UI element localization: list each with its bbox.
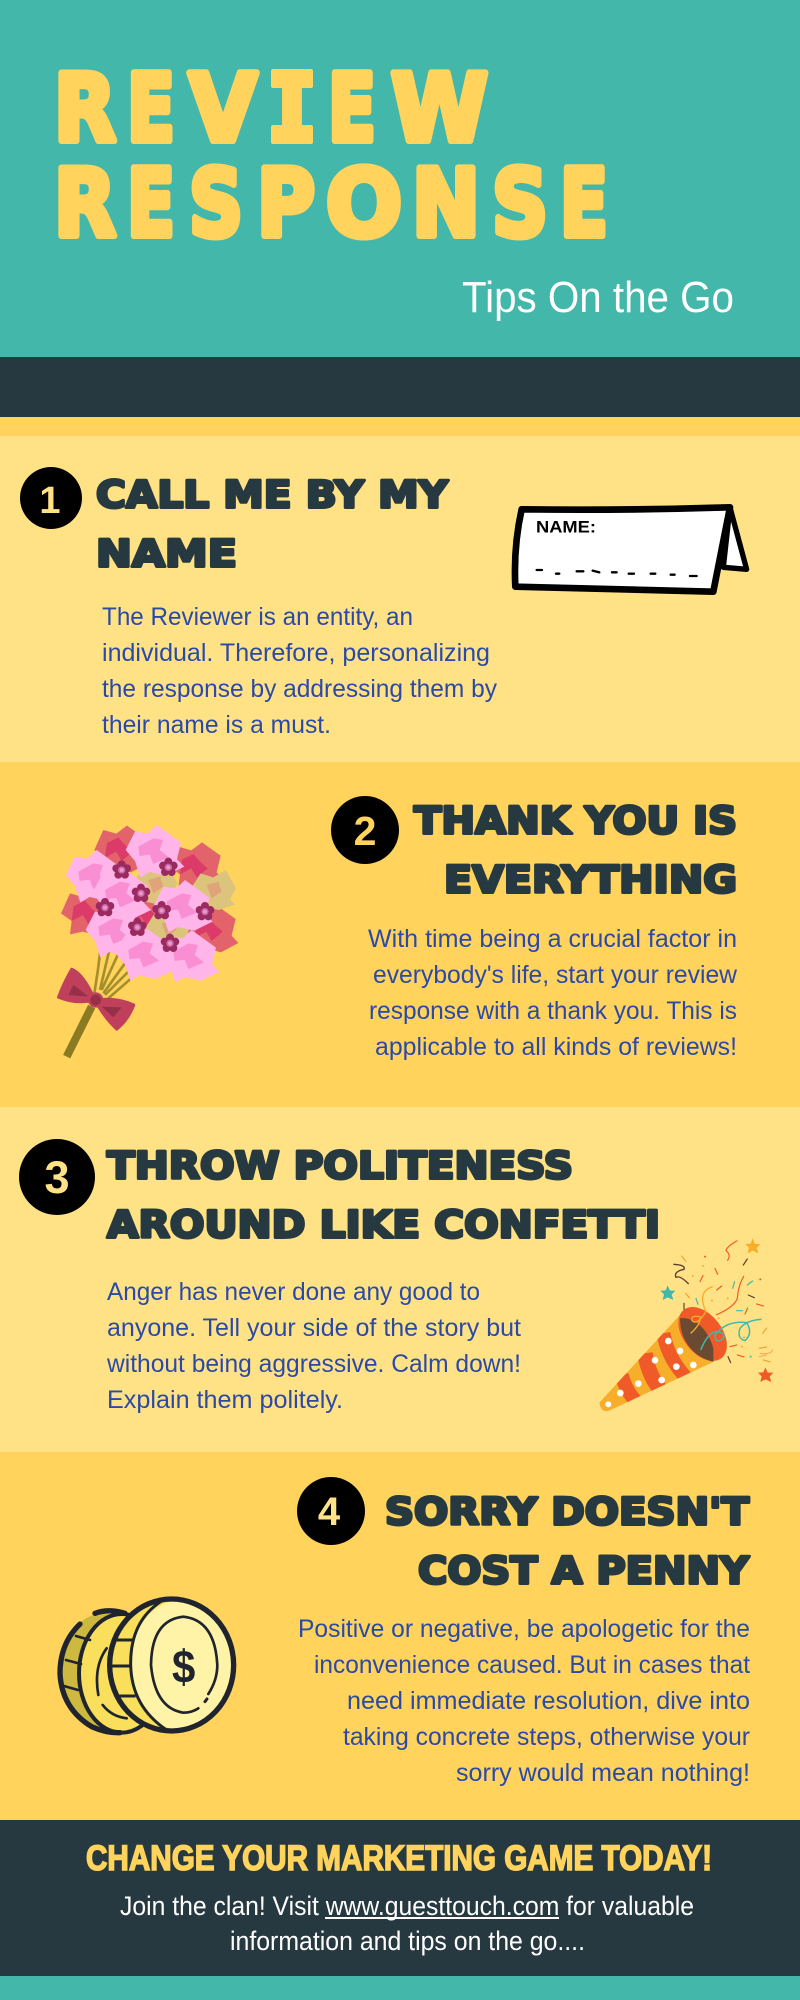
title: N: [412, 150, 480, 258]
title: S: [492, 150, 548, 258]
panel: tip 1: [0, 436, 800, 762]
number badge 4: 4: [318, 1490, 341, 1534]
icon: party popper: [599, 1238, 773, 1411]
yellow band: [0, 417, 800, 436]
body text 1: The Reviewer is an entity, an: [102, 603, 413, 631]
body text 3: without being aggressive. Calm down!: [106, 1350, 521, 1378]
heading 2: THANK YOU IS: [414, 800, 737, 842]
body text 4: [298, 1615, 750, 1787]
number badge 1: 1: [39, 480, 61, 522]
heading 3: [107, 1144, 660, 1246]
icon: name card: NAME:: [536, 518, 596, 537]
number badge 4: [297, 1477, 365, 1545]
panel: tip 3: [0, 1107, 800, 1452]
heading 2: EVERYTHING: [444, 858, 737, 902]
number badge 2: [331, 796, 399, 864]
heading 2: [414, 800, 737, 902]
bottom teal band: [0, 1976, 800, 2000]
title: O: [326, 150, 402, 258]
heading 4: COST A PENNY: [418, 1550, 750, 1592]
heading 3: AROUND LIKE CONFETTI: [107, 1204, 660, 1246]
heading 1: NAME: [96, 532, 237, 576]
panel: tip 4: [0, 1452, 800, 1820]
body text 3: anyone. Tell your side of the story but: [107, 1314, 521, 1342]
body text 4: sorry would mean nothing!: [456, 1759, 750, 1787]
body text 1: individual. Therefore, personalizing: [102, 639, 490, 667]
header panel: [0, 0, 800, 357]
icon: coins: [60, 1599, 234, 1733]
title: W: [391, 54, 488, 162]
title: R: [54, 54, 116, 162]
subtitle: Tips On the Go: [462, 273, 734, 322]
title: E: [127, 150, 175, 258]
heading 1: CALL ME BY MY: [96, 474, 449, 516]
footer text: information and tips on the go....: [230, 1926, 585, 1956]
title: E: [328, 54, 376, 162]
body text 4: need immediate resolution, dive into: [347, 1687, 750, 1715]
body text 3: Explain them politely.: [107, 1386, 343, 1414]
title: S: [189, 150, 243, 258]
number badge 1: [20, 467, 82, 529]
title: V: [189, 54, 257, 162]
dark band: [0, 357, 800, 417]
body text 4: Positive or negative, be apologetic for the: [298, 1615, 750, 1643]
title: [54, 54, 608, 258]
number badge 3: [19, 1139, 95, 1215]
icon: coins: $: [172, 1641, 195, 1693]
body text 1: [102, 603, 497, 739]
body text 3: [106, 1278, 521, 1414]
heading 4: [385, 1490, 750, 1592]
footer text: Join the clan! Visit www.guesttouch.com for valuable: [120, 1891, 694, 1921]
icon: name card: [515, 507, 747, 592]
title: P: [257, 150, 315, 258]
number badge 2: 2: [354, 808, 376, 854]
title: I: [278, 54, 306, 162]
number badge 3: 3: [44, 1152, 70, 1203]
body text 2: applicable to all kinds of reviews!: [375, 1033, 737, 1061]
body text 3: Anger has never done any good to: [107, 1278, 480, 1306]
body text 2: With time being a crucial factor in: [368, 925, 737, 953]
panel: tip 2: [0, 762, 800, 1107]
body text 4: taking concrete steps, otherwise your: [343, 1723, 750, 1751]
body text 2: [368, 925, 738, 1061]
title: R: [54, 150, 116, 258]
title: E: [127, 54, 175, 162]
heading 1: [96, 474, 449, 576]
panel: footer call to action: [0, 1820, 800, 1976]
body text 4: inconvenience caused. But in cases that: [314, 1651, 750, 1679]
body text 1: the response by addressing them by: [102, 675, 497, 703]
heading 3: THROW POLITENESS: [107, 1144, 573, 1188]
icon: flower bouquet: [58, 825, 238, 1057]
title: E: [560, 150, 608, 258]
body text 2: response with a thank you. This is: [369, 997, 737, 1025]
body text 2: everybody's life, start your review: [373, 961, 738, 989]
heading 4: SORRY DOESN'T: [385, 1490, 750, 1534]
footer text: [120, 1891, 694, 1956]
body text 1: their name is a must.: [102, 711, 331, 739]
